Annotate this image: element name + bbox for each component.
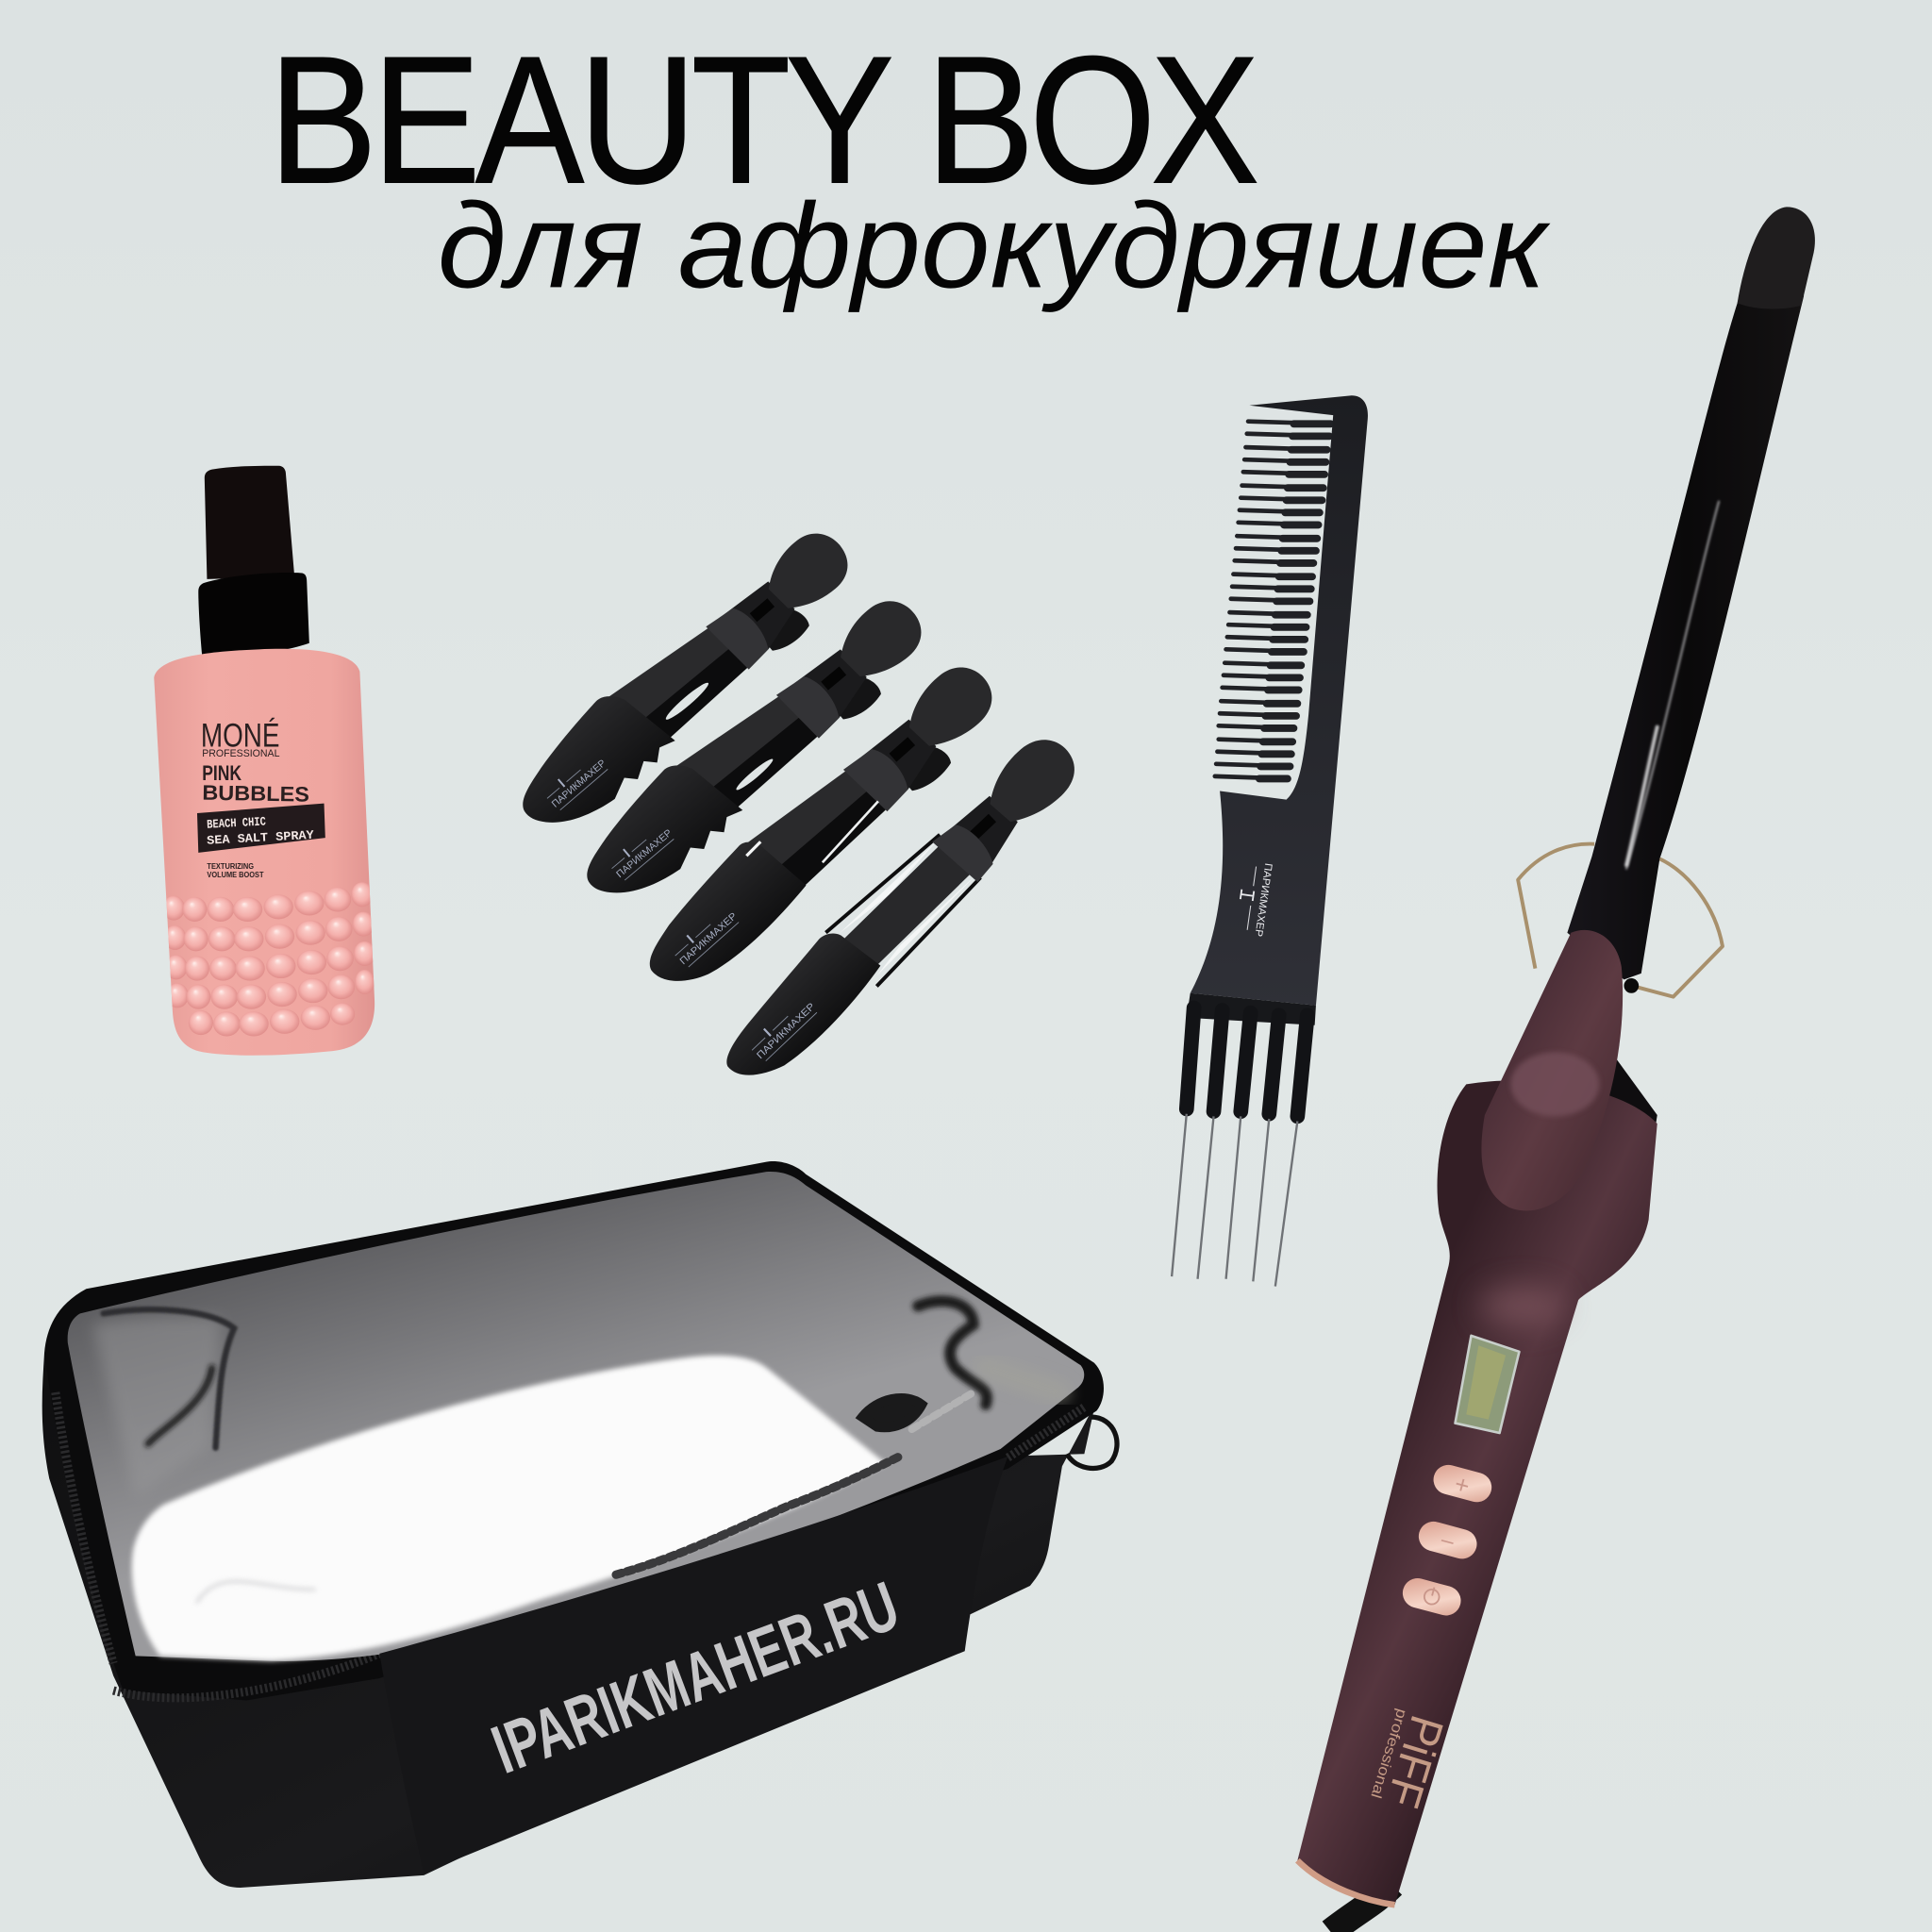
- bottle label: [197, 718, 325, 879]
- handle body: [1297, 1080, 1657, 1905]
- power cord: [1331, 1885, 1392, 1932]
- bottle label: PINK: [202, 761, 242, 785]
- white tray behind window: [132, 1356, 886, 1661]
- bottle label: MONÉ: [201, 718, 279, 755]
- minus button: –: [1439, 1526, 1457, 1554]
- bag top rim and side zip: [44, 1161, 1104, 1700]
- product: pink sea salt spray bottle: [154, 466, 375, 1056]
- hair clip 3: [628, 650, 1013, 1006]
- front panel: [379, 1457, 1008, 1873]
- brand logo on handle: professional: [1367, 1707, 1409, 1800]
- comb logo: [1236, 860, 1274, 938]
- LCD screen: [1456, 1336, 1519, 1433]
- plus button: +: [1452, 1470, 1473, 1500]
- curler barrel: [1567, 295, 1804, 979]
- power button: [1399, 1574, 1464, 1619]
- curler hub wedge: [1607, 1047, 1657, 1171]
- barrel highlight: [1626, 502, 1719, 869]
- plus button: [1430, 1461, 1495, 1507]
- comb handle: [1191, 395, 1368, 1006]
- product: transparent cosmetic bag: [42, 1161, 1117, 1888]
- side loop: [1067, 1417, 1117, 1468]
- bag brand text: IPARIKMAHER.RU: [482, 1568, 908, 1789]
- bag fabric body: [42, 1353, 1095, 1888]
- icon: bottle nozzle and cap: [198, 466, 309, 656]
- bottle label: PROFESSIONAL: [202, 748, 279, 759]
- minus button: [1415, 1518, 1480, 1562]
- product: four hair clips: [500, 515, 1094, 1099]
- bottle label: VOLUME BOOST: [207, 870, 264, 879]
- copper end band: [1297, 1860, 1395, 1905]
- bottle body: [154, 649, 375, 1056]
- window reflections: [92, 1301, 1059, 1602]
- comb metal pins: [1172, 1114, 1297, 1287]
- comb teeth: [1215, 422, 1331, 778]
- hair clip 1: [500, 515, 870, 849]
- handle highlight: [1480, 1287, 1563, 1325]
- product: curling iron: [1297, 207, 1815, 1932]
- brand logo on handle: PiFF: [1376, 1709, 1454, 1813]
- comb logo: ПАРИКМАХЕР: [1252, 862, 1274, 938]
- curler wire stand: [1518, 844, 1723, 997]
- screw: [1624, 978, 1639, 993]
- product: pintail comb: [1172, 395, 1368, 1287]
- comb fork prongs: [1187, 993, 1316, 1116]
- clamp lever: [1481, 930, 1623, 1210]
- hair clip 3: ПАРИКМАХЕР: [677, 910, 740, 967]
- zipper detail: [56, 1392, 1084, 1698]
- hair clip 1: ПАРИКМАХЕР: [550, 758, 608, 810]
- hair clip 2: ПАРИКМАХЕР: [615, 827, 675, 880]
- hair clip 4: [708, 725, 1094, 1099]
- hair clip 2: [565, 582, 943, 920]
- title: BEAUTY BOX: BEAUTY BOX: [269, 19, 1256, 221]
- hair clip 4: ПАРИКМАХЕР: [755, 1001, 817, 1061]
- bottle label: SEA SALT SPRAY: [207, 828, 314, 848]
- subtitle: для афрокудряшек: для афрокудряшек: [438, 178, 1551, 313]
- bubble texture: [162, 882, 375, 1036]
- bottle label: BUBBLES: [202, 781, 309, 807]
- bottle label: TEXTURIZING: [207, 861, 254, 871]
- bottle label: BEACH CHIC: [207, 814, 266, 832]
- transparent window: [68, 1172, 1084, 1661]
- barrel tip: [1738, 207, 1815, 309]
